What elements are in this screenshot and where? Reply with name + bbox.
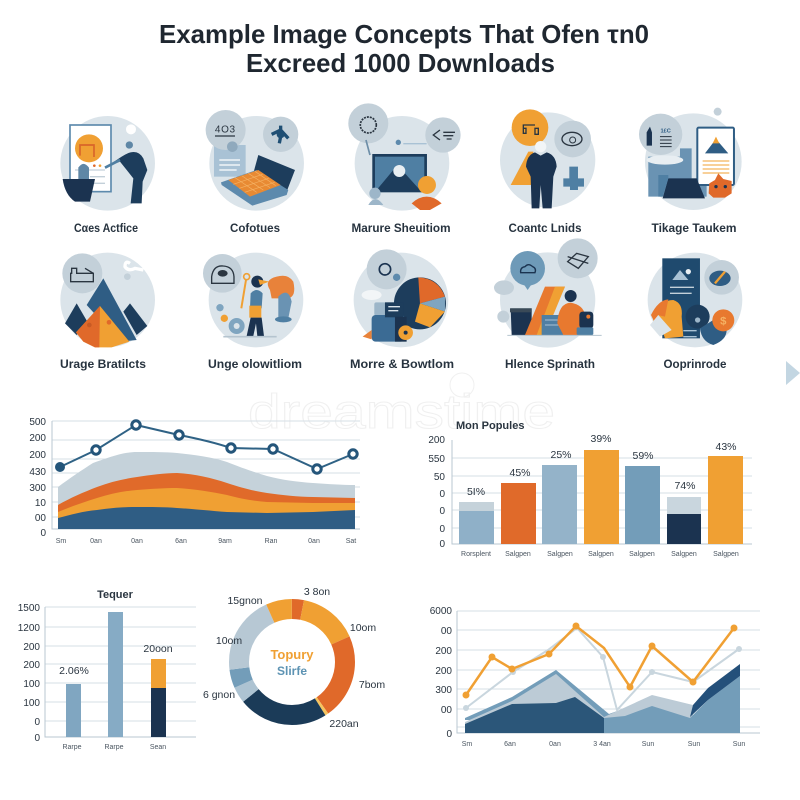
- chart: bar chart with percentages: Rorsplent: [461, 551, 491, 558]
- chart: area and line combo: 0: [446, 729, 452, 740]
- label: second row captions: Urage Bratilcts: [60, 357, 146, 371]
- label: first row captions: Tikage Taukem: [652, 221, 736, 235]
- label: second row captions: [60, 357, 727, 371]
- chart: donut: 3 8on: [304, 586, 330, 598]
- chart: small bar chart: Sean: [150, 744, 166, 751]
- chart: small bar chart: 1500: [18, 603, 40, 614]
- chart: area and line combo: 0an: [549, 741, 561, 748]
- chart: donut: 6 gnon: [203, 689, 235, 701]
- chart: donut: 220an: [329, 718, 359, 730]
- chart: bar chart with percentages: 39%: [590, 433, 612, 445]
- chart: area and line combo: Sm: [462, 741, 472, 748]
- chart: small bar chart: Rarpe: [62, 744, 82, 751]
- chart: bar chart with percentages: 200: [428, 435, 445, 446]
- chart: stacked area with line: 6an: [175, 538, 187, 545]
- chart: bar chart with percentages: 0: [439, 539, 445, 550]
- icon: tablet and devices: [639, 108, 742, 210]
- chart: bar chart with percentages: Mon Popules: [456, 420, 524, 432]
- chart: stacked area with line: 200: [29, 450, 46, 461]
- icon: person with gears: [203, 253, 303, 347]
- chart: stacked area with line: 0an: [131, 538, 143, 545]
- icon: document and coins: $: [720, 315, 727, 327]
- label: second row captions: Ooprinrode: [664, 357, 727, 371]
- chart: bar chart with percentages: 50: [434, 472, 445, 483]
- title: Example Image Concepts That Ofen τn0: [159, 19, 649, 49]
- icon: businessman: [500, 109, 595, 208]
- icon: document and coins: [648, 253, 742, 347]
- chart: area and line combo: Sun: [642, 741, 654, 748]
- chart: area and line combo: 3 4an: [593, 741, 611, 748]
- chart: small bar chart: [18, 589, 196, 751]
- label: first row captions: Marure Sheuitiom: [352, 221, 450, 235]
- chart: small bar chart: 100: [23, 679, 40, 690]
- icon: tablet and devices: 1£C: [660, 128, 671, 134]
- chart: stacked area with line: 430: [29, 467, 46, 478]
- chart: donut: Topury: [270, 647, 314, 662]
- chart: small bar chart: 100: [23, 698, 40, 709]
- chart: stacked area with line: Ran: [265, 538, 278, 545]
- chart: donut: [203, 586, 385, 730]
- chart: bar chart with percentages: 0: [439, 489, 445, 500]
- chart: bar chart with percentages: 550: [428, 454, 445, 465]
- chart: bar chart with percentages: Salgpen: [505, 551, 531, 558]
- chart: stacked area with line: Sm: [56, 538, 66, 545]
- chart: stacked area with line: [29, 417, 360, 545]
- label: second row captions: Morre & Bowtlom: [350, 357, 454, 371]
- chart: donut: 10om: [216, 635, 242, 647]
- chart: small bar chart: 2.06%: [59, 665, 89, 677]
- chart: bar chart with percentages: Salgpen: [671, 551, 697, 558]
- icon: image monitor: [348, 103, 461, 211]
- watermark: dreamstime: [248, 386, 555, 439]
- chart: stacked area with line: 00: [35, 513, 46, 524]
- chart: small bar chart: 0: [34, 717, 40, 728]
- chart: area and line combo: 200: [435, 646, 452, 657]
- chart: area and line combo: 00: [441, 626, 452, 637]
- chart: bar chart with percentages: 5I%: [467, 486, 485, 498]
- label: first row captions: Cαes Actfice: [74, 221, 138, 235]
- chart: small bar chart: 200: [23, 642, 40, 653]
- chart: stacked area with line: 0: [40, 528, 46, 539]
- chart: area and line combo: [430, 606, 760, 748]
- icon: laptop: [206, 110, 304, 211]
- chart: area and line combo: 300: [435, 685, 452, 696]
- title: [159, 19, 649, 78]
- chart: small bar chart: 20oon: [143, 643, 173, 655]
- label: first row captions: [74, 221, 736, 235]
- label: second row captions: Hlence Sprinath: [505, 357, 595, 371]
- chart: small bar chart: Rarpe: [104, 744, 124, 751]
- icon: presenter at board: [60, 116, 155, 211]
- chart: bar chart with percentages: 74%: [674, 480, 696, 492]
- label: first row captions: Cofotues: [230, 221, 280, 235]
- title: Excreed 1000 Downloads: [246, 48, 555, 78]
- chart: bar chart with percentages: 59%: [632, 450, 654, 462]
- chart: area and line combo: 00: [441, 705, 452, 716]
- chart: stacked area with line: Sat: [346, 538, 356, 545]
- chart: area and line combo: Sun: [688, 741, 700, 748]
- chart: stacked area with line: 500: [29, 417, 46, 428]
- chart: small bar chart: 1200: [18, 623, 40, 634]
- chart: bar chart with percentages: [428, 420, 752, 558]
- arrow: next: [786, 361, 800, 385]
- label: second row captions: Unge olowitliom: [208, 357, 302, 371]
- chart: bar chart with percentages: 0: [439, 524, 445, 535]
- chart: area and line combo: 200: [435, 666, 452, 677]
- chart: bar chart with percentages: 45%: [509, 467, 531, 479]
- icon: person at desk: [494, 238, 602, 348]
- chart: stacked area with line: 10: [35, 498, 46, 509]
- icon: luggage and pie: [354, 249, 448, 347]
- chart: donut: 10om: [350, 622, 376, 634]
- chart: area and line combo: 6000: [430, 606, 452, 617]
- watermark: [248, 373, 555, 439]
- chart: donut: 15gnon: [227, 595, 263, 607]
- chart: stacked area with line: 0an: [90, 538, 102, 545]
- chart: area and line combo: Sun: [733, 741, 745, 748]
- chart: bar chart with percentages: Salgpen: [629, 551, 655, 558]
- chart: small bar chart: 0: [34, 733, 40, 744]
- chart: small bar chart: Tequer: [97, 589, 134, 601]
- chart: small bar chart: 200: [23, 660, 40, 671]
- chart: bar chart with percentages: Salgpen: [547, 551, 573, 558]
- chart: donut: Slirfe: [277, 664, 307, 678]
- chart: stacked area with line: 9am: [218, 538, 232, 545]
- chart: stacked area with line: 0an: [308, 538, 320, 545]
- chart: area and line combo: 6an: [504, 741, 516, 748]
- chart: bar chart with percentages: 25%: [550, 449, 572, 461]
- chart: bar chart with percentages: 0: [439, 506, 445, 517]
- chart: stacked area with line: 300: [29, 483, 46, 494]
- icon: laptop: 4O3: [215, 125, 236, 136]
- chart: bar chart with percentages: Salgpen: [713, 551, 739, 558]
- chart: bar chart with percentages: Salgpen: [588, 551, 614, 558]
- chart: bar chart with percentages: 43%: [715, 441, 737, 453]
- chart: stacked area with line: 200: [29, 433, 46, 444]
- chart: donut: 7bom: [359, 679, 385, 691]
- icon: mountains: [60, 253, 155, 347]
- label: first row captions: Coantc Lnids: [508, 221, 582, 235]
